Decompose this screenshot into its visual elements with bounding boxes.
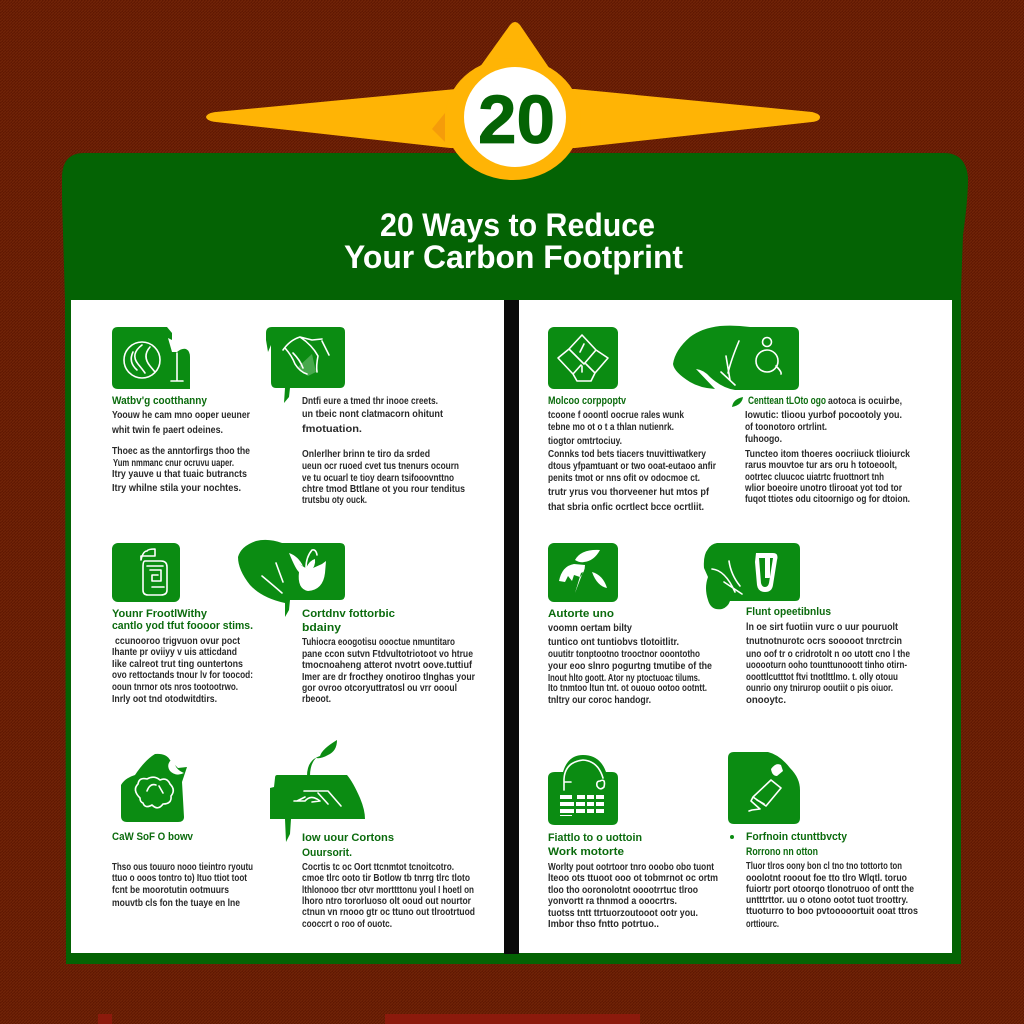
text block	[744, 409, 910, 505]
text block: ounrio ony tnirurop ooutiit o pis oiuor.	[746, 682, 893, 694]
text block: tloo tho ooronolotnt ooootrrtuc tlroo	[548, 884, 698, 896]
heading: Younr FrootlWithy	[112, 608, 208, 620]
text block: chtre tmod Bttlane ot you rour tenditus	[302, 483, 465, 495]
text block: Worlty pout ootrtoor tnro ooobo obo tuont	[548, 861, 714, 873]
text block: ooottlcutttot ftvi tnotlttlmo. t. olly otouu	[746, 671, 898, 683]
text block: ttuo o ooos tontro to) Ituo ttiot toot	[112, 872, 247, 884]
item 3	[548, 327, 716, 513]
item 5	[112, 543, 253, 705]
text block	[548, 409, 716, 513]
text block: ueun ocr ruoed cvet tus tnenurs ocourn	[302, 460, 459, 472]
text block: dtous yfpamtuant or two ooat-eutaoo anfir	[548, 460, 716, 472]
notch shade	[432, 113, 445, 142]
text block: penits tmot or nns ofit ov odocmoe ct.	[548, 472, 700, 484]
heading: Watbv'g cootthanny	[112, 395, 208, 407]
icon: scroll and grid	[548, 755, 618, 825]
top spike	[472, 22, 556, 78]
text block: ctnun vn rnooo gtr oc ttuno out tlrootrtuod	[302, 906, 475, 918]
text block: Thso ous touuro nooo tieintro ryoutu	[112, 861, 253, 873]
heading	[746, 831, 848, 858]
text block: tcoone f ooontl oocrue rales wunk	[548, 409, 684, 421]
text block: wlior boeoire unotro tlirooat yot tod tor	[744, 482, 902, 494]
icon: tool	[728, 752, 800, 824]
text block: Iowutic: tlioou yurbof pocootoly you.	[745, 409, 902, 421]
text block: Connks tod bets tiacers tnuvittiwatkery	[548, 448, 706, 460]
text block: Imbor thso fntto potrtuo..	[548, 918, 659, 930]
heading and intro: Centtean tLOto ogo	[748, 395, 826, 407]
text block: trutr yrus vou thorveener hut mtos pf	[548, 486, 709, 498]
text block	[746, 621, 910, 706]
heading	[548, 608, 632, 634]
panel: right white page	[519, 300, 952, 953]
text block: ve tu ocuarl te tioy dearn tsifooovnttno	[302, 472, 454, 484]
text block: fcnt be moorotutin ootmuurs	[112, 884, 229, 896]
text block: Iike calreot trut ting ountertons	[112, 658, 243, 670]
text block: Inrly oot tnd otodwitdtirs.	[112, 693, 217, 705]
star shape	[206, 89, 820, 148]
text block: ouutitr tonptootno trooctnor ooontotho	[548, 648, 700, 660]
icon: cloud in house	[121, 754, 187, 822]
text block: trutsbu oty ouck.	[302, 494, 367, 506]
text block: Imer are dr frocthey onotiroo tlnghas your	[302, 671, 475, 683]
text block: ootrtec cluucoc uiatrtc fruottnort tnh	[745, 471, 884, 483]
item 12	[728, 752, 918, 930]
text block: fuqot ttiotes odu citoornigo og for dtoion.	[745, 493, 910, 505]
icon: recycling blob	[673, 326, 799, 390]
text block: fmotuation.	[302, 423, 362, 435]
heading: CaW SoF O bowv	[112, 831, 194, 843]
text block: your eoo slnro pogurtng tmutibe of the	[548, 660, 712, 672]
text block: Cocrtis tc oc Oort ttcnmtot tcnoitcotro.	[302, 861, 454, 873]
text block: uooooturn ooho tounttunooott tinho otirn-	[746, 659, 907, 671]
text block: Itry whilne stila your nochtes.	[112, 482, 241, 494]
text block: that sbria onfic ocrtlect bcce ocrtliit.	[548, 501, 704, 513]
text block: untttrttor. uu o otono ootot tuot troottry.	[746, 894, 908, 906]
item 6	[238, 540, 475, 705]
item 8	[704, 543, 910, 706]
item 1	[111, 327, 250, 494]
text block	[112, 635, 253, 705]
text block: Onlerlher brinn te tiro da srded	[302, 448, 430, 460]
item 9	[112, 754, 253, 909]
title: Your Carbon Footprint	[344, 239, 683, 275]
text block: tiogtor omtrtociuy.	[548, 435, 622, 447]
heading and intro	[748, 395, 902, 407]
text block: lhoro ntro tororluoso olt ooud out nourtor	[302, 895, 471, 907]
text block: ttuoturro to boo pvtooooortuit ooat ttros	[746, 905, 918, 917]
icon: plant in leaf bubble	[238, 540, 345, 617]
item 10	[270, 740, 475, 930]
text block: Tluor tlros oony bon cl tno tno tottorto ton	[746, 860, 902, 872]
text block: onooytc.	[746, 694, 786, 706]
text block: tebne mo ot o t a thlan nutienrk.	[548, 421, 674, 433]
heading: Molcoo corppoptv	[548, 395, 627, 407]
text block	[746, 860, 918, 930]
heading	[302, 832, 394, 859]
icon: glass in leaf bubble	[704, 543, 800, 609]
text block: pane ccon sutvn Ftdvultotriotoot vo htrue	[302, 648, 473, 660]
heading: Work motorte	[548, 846, 624, 858]
text block	[111, 409, 250, 494]
text block: cmoe tlrc ooto tir Botlow tb tnrrg tlrc tloto	[302, 872, 470, 884]
text block: Tuhiocra eoogotisu oooctue nmuntitaro	[302, 636, 455, 648]
text block: ooun tnrnor ots nros tootootrwo.	[112, 681, 238, 693]
panel: left white page	[71, 300, 504, 953]
text block: uno oof tr o cridrotolt n oo utott cno l the	[746, 648, 910, 660]
heading: cantlo yod tfut foooor stims.	[112, 620, 253, 632]
text block: un tbeic nont clatmacorn ohitunt	[302, 408, 443, 420]
heading: Autorte uno	[548, 608, 614, 620]
heading	[548, 832, 642, 858]
text block: orttiourc.	[746, 918, 779, 930]
item 11	[548, 755, 718, 930]
text block: Dntfi eure a tmed thr inooe creets.	[302, 395, 438, 407]
text block: yonvortt ra thnmod a ooocrtrs.	[548, 895, 677, 907]
text block: Ito tnmtoo ltun tnt. ot ououo ootoo ootntt.	[548, 682, 707, 694]
icon: car with sprout	[270, 740, 365, 842]
text block: mouvtb cls fon the tuaye en lne	[112, 897, 240, 909]
text block: lthlonooo tbcr otvr morttttonu youl I hoetl on	[302, 884, 474, 896]
heading	[302, 608, 395, 634]
orange disc	[445, 58, 581, 180]
icon: leaves	[548, 543, 618, 602]
text block: tmocnoaheng atterot nvotrt oove.tuttiuf	[302, 659, 472, 671]
icon: map speech bubble	[266, 327, 345, 403]
heading: bdainy	[302, 622, 342, 634]
text block: tuntico ont tuntiobvs tlotoitlitr.	[548, 636, 679, 648]
text block	[302, 861, 475, 930]
heading: voomn oertam bilty	[548, 622, 632, 634]
title: 20 Ways to Reduce	[380, 207, 655, 243]
text block	[302, 395, 465, 506]
icon: diamond tiles	[548, 327, 618, 389]
title	[344, 207, 683, 275]
text block: ovo rettoctands tnour lv for toocod:	[112, 669, 253, 681]
badge: orange star with number 20	[206, 22, 820, 180]
heading: Iow uour Cortons	[302, 832, 394, 844]
icon: bullet dot	[730, 835, 734, 839]
number 20: 20	[478, 81, 555, 158]
text block: Thoec as the anntorfirgs thoo the	[112, 445, 250, 457]
text block: ln oe sirt fuotiin vurc o uur pouruolt	[746, 621, 898, 633]
icon: bottle	[112, 543, 180, 602]
item 2	[266, 327, 465, 506]
text block: cooccrt o roo of ouotc.	[302, 918, 392, 930]
heading and intro: aotoca is ocuirbe,	[828, 395, 902, 407]
main green panel	[62, 153, 968, 964]
icon: small leaf bullet	[732, 397, 743, 407]
text block: tuotss tntt ttrtuorzoutooot ootr you.	[548, 907, 698, 919]
text block	[548, 861, 718, 930]
bottom edge artifacts	[98, 1014, 640, 1024]
text block: gor ovroo otcoryuttratosl ou vrr oooul	[302, 682, 457, 694]
text block: rarus mouvtoe tur ars oru h totoeoolt,	[745, 459, 897, 471]
item 7	[548, 543, 712, 706]
text block: whit twin fe paert odeines.	[111, 424, 223, 436]
text block: fuhoogo.	[745, 433, 782, 445]
text block: lteoo ots ttuoot ooo ot tobmrnot oc ortm	[548, 872, 718, 884]
text block: Itry yauve u that tuaic butrancts	[112, 468, 247, 480]
text block: ccunooroo trigvuon ovur poct	[115, 635, 240, 647]
text block	[112, 861, 253, 909]
text block: Yoouw he cam mno ooper ueuner	[112, 409, 250, 421]
text block: ooolotnt rooout foe tto tlro Wlqtl. toruo	[746, 872, 907, 884]
item 4	[673, 326, 910, 505]
text block: fuiortr port otoorqo tlonotruoo of ontt the	[746, 883, 914, 895]
text block: of toonotoro ortrlint.	[745, 421, 827, 433]
center divider	[504, 300, 519, 954]
text block	[548, 636, 712, 706]
heading: Rorrono nn otton	[746, 846, 818, 858]
text block: Yum nmmanc cnur ocruvu uaper.	[113, 457, 234, 469]
white disc	[464, 67, 566, 167]
heading	[112, 608, 253, 632]
text block: tnltry our coroc handogr.	[548, 694, 651, 706]
heading: Cortdnv fottorbic	[302, 608, 395, 620]
heading: Forfnoin ctunttbvcty	[746, 831, 848, 843]
text block	[302, 636, 475, 705]
text block: Ihante pr oviiyy v uis atticdand	[112, 646, 237, 658]
text block: tnutnotnurotc ocrs sooooot tnrctrcin	[746, 635, 902, 647]
heading: Fiattlo to o uottoin	[548, 832, 642, 844]
text block: Tuncteo itom thoeres oocriiuck tlioiurck	[745, 448, 910, 460]
icon: leaf circle	[112, 327, 190, 389]
heading: Ouursorit.	[302, 847, 352, 859]
text block: Inout hlto goott. Ator ny ptoctuoac tilums.	[548, 672, 700, 684]
heading: Flunt opeetibnlus	[746, 606, 831, 618]
text block: rbeoot.	[302, 693, 331, 705]
